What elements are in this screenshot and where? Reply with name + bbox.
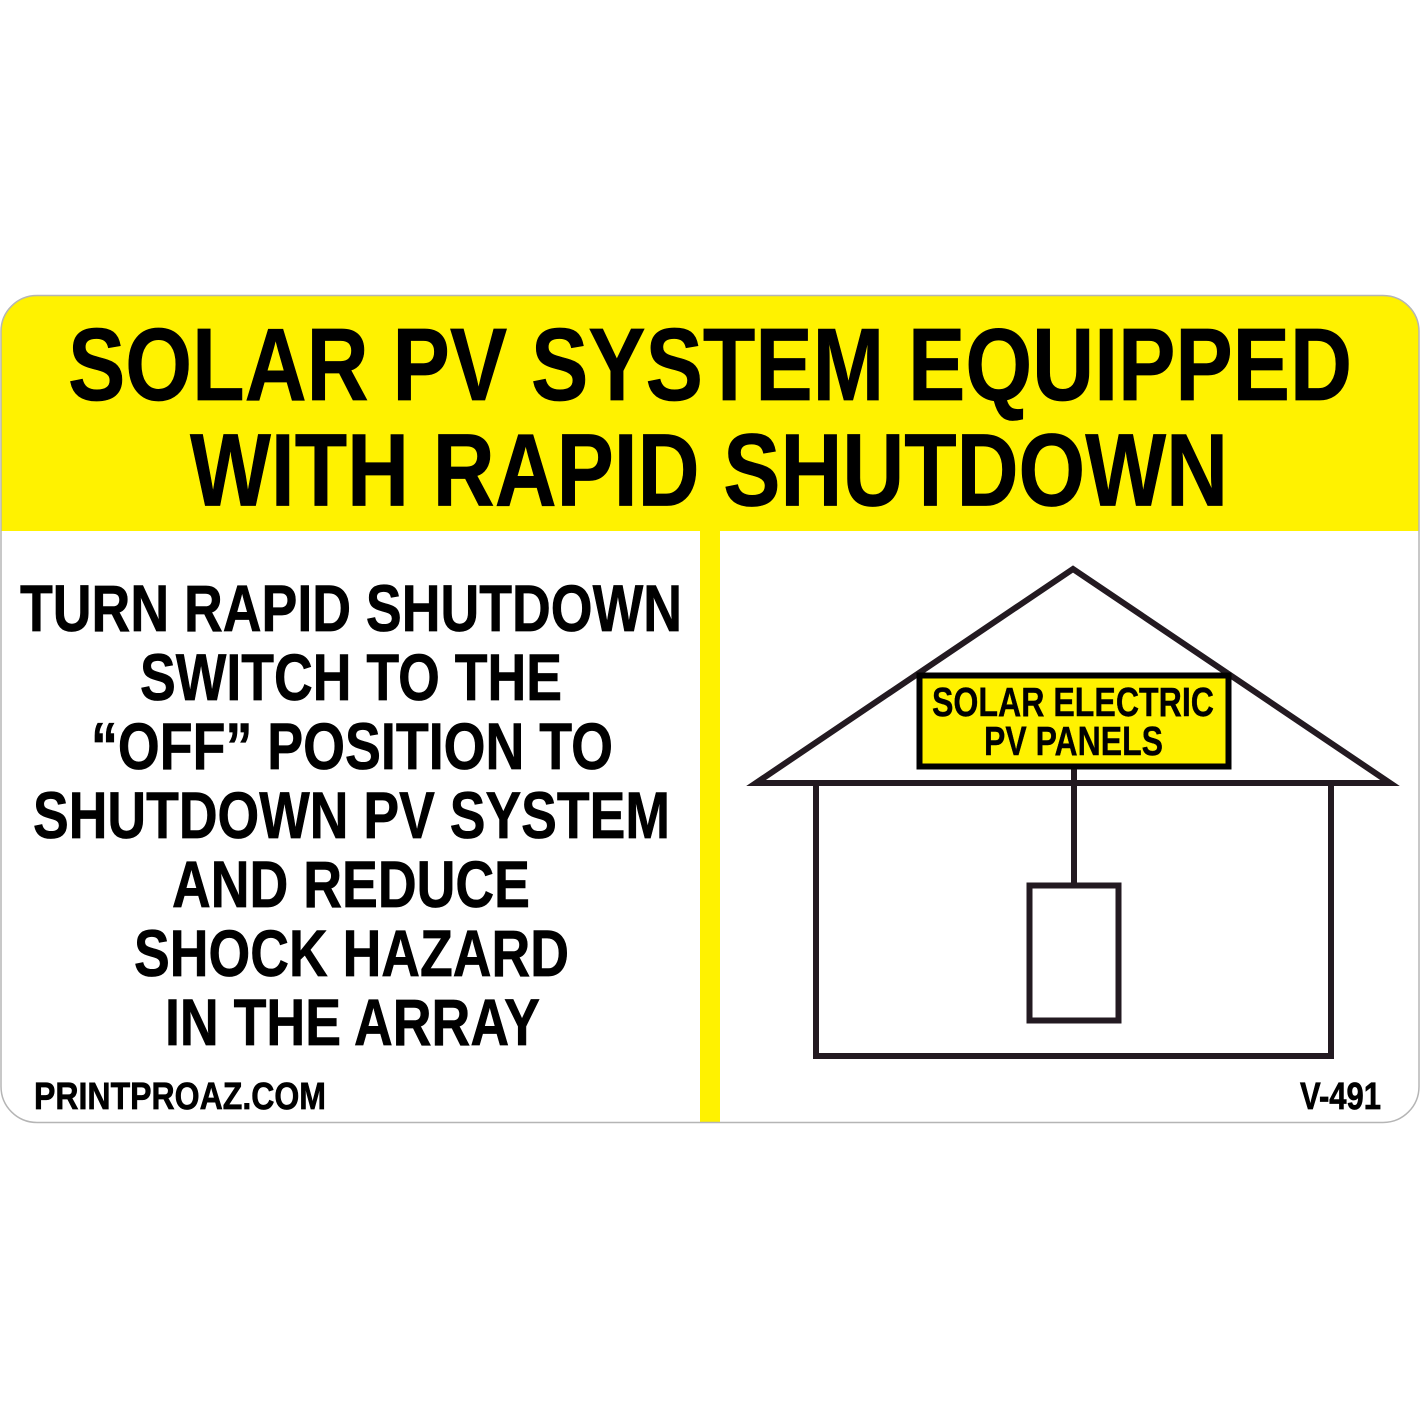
title: [68, 307, 1352, 528]
title: WITH RAPID SHUTDOWN: [190, 412, 1228, 528]
panel: solar electric PV panels label: [920, 676, 1228, 766]
instruction text block: SHOCK HAZARD: [134, 916, 569, 990]
instruction text block: SWITCH TO THE: [140, 640, 562, 714]
website footer text: PRINTPROAZ.COM: [34, 1076, 326, 1118]
instruction text block: TURN RAPID SHUTDOWN: [20, 571, 682, 645]
instruction text block: SHUTDOWN PV SYSTEM: [33, 778, 670, 852]
icon: house roof: [756, 569, 1390, 783]
instruction text block: IN THE ARRAY: [165, 985, 540, 1059]
panel: solar electric PV panels label: PV PANELS: [984, 718, 1163, 764]
panel: solar electric PV panels label: SOLAR ELECTRIC: [932, 679, 1214, 725]
product code: V-491: [1300, 1076, 1381, 1118]
icon: house walls: [816, 783, 1331, 1056]
panel: yellow header band: [0, 295, 1420, 531]
yellow vertical divider: [700, 531, 720, 1122]
connector line: [1071, 767, 1077, 885]
instruction text block: AND REDUCE: [172, 847, 530, 921]
label outline: [1, 296, 1419, 1122]
infographic: solar PV rapid shutdown label: [0, 294, 1420, 1124]
diagram: house: [756, 569, 1390, 1056]
panel: label background: [1, 296, 1419, 1122]
instruction text block: “OFF” POSITION TO: [91, 709, 613, 783]
instruction text block: [20, 571, 682, 1059]
icon: rapid shutdown switch box: [1030, 886, 1118, 1020]
